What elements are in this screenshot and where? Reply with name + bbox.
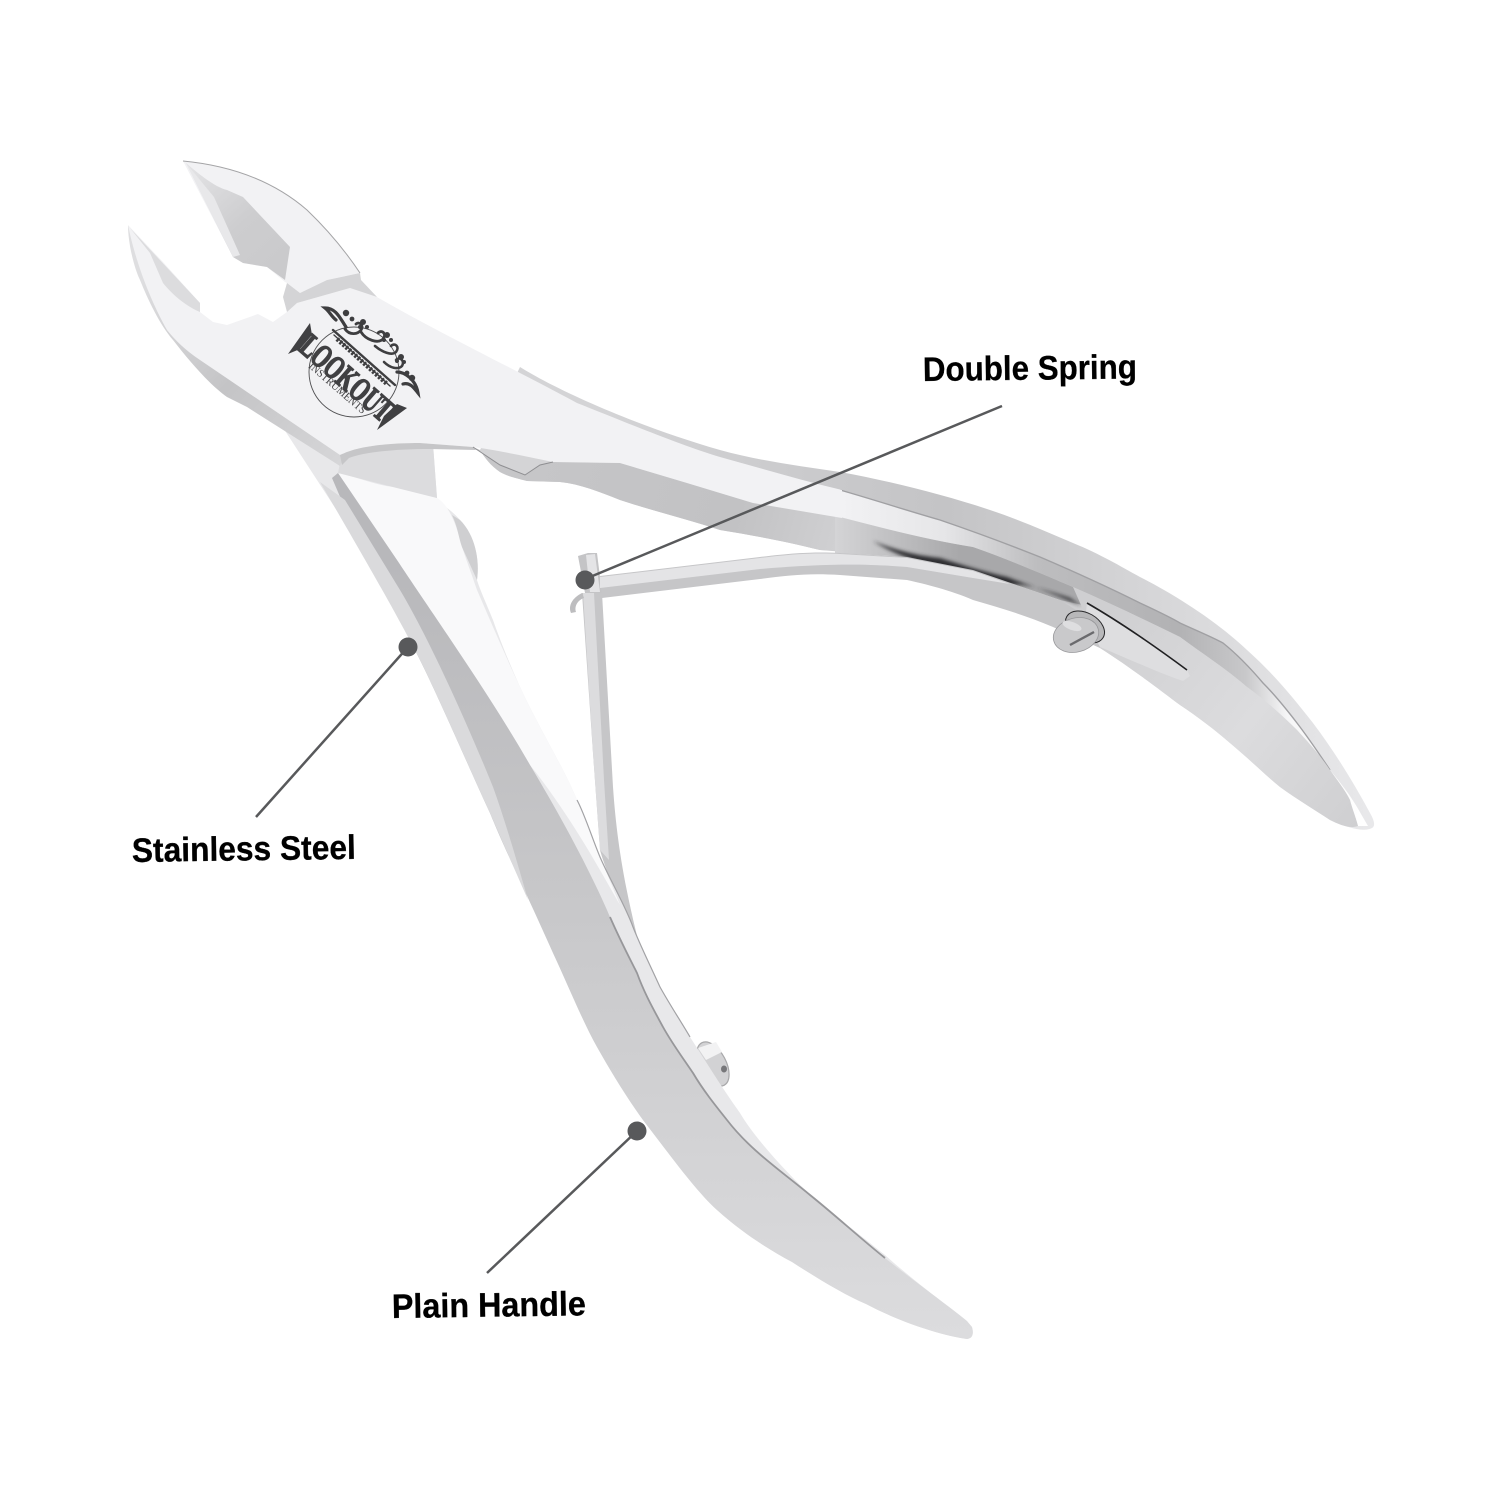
brand logo [288,308,418,430]
handle tail face [1073,587,1358,827]
anchor dot [628,1122,646,1140]
leader line [256,647,408,817]
upper jaw cutting facet [186,163,290,280]
label text: Double Spring [923,348,1137,389]
shoulder [338,444,437,498]
spring leaf: vertical bar [570,553,642,955]
slot and tail of spring [1085,603,1190,681]
callout: double spring [576,348,1137,590]
label text: Stainless Steel [132,829,356,870]
lower grey face [473,447,880,553]
shadow bed under handle [835,514,1100,620]
spring leaf: horizontal bar [600,552,1190,681]
lower handle arm [280,423,973,1339]
screw on lower handle [690,1037,736,1091]
logo subtitle: INSTRUMENTS [306,360,368,417]
bright facet [338,473,620,905]
leader line [590,406,1002,577]
wordmark end flares [288,323,407,430]
lower jaw cutting facet [130,228,200,312]
crown [325,308,418,393]
ridge strip [840,490,1368,826]
jaw and joint head [128,161,842,518]
callout: stainless steel [132,638,418,870]
upper handle arm [473,367,1374,830]
head underside band [340,443,476,465]
logo circle [309,327,399,417]
anchor dot [576,570,594,590]
leader line [487,1131,637,1273]
grey facet [332,473,973,1339]
screw on upper handle [1049,604,1110,657]
joint band [283,273,377,312]
top edge outline [183,161,360,273]
inner edge streaks [610,917,885,1258]
label text: Plain Handle [392,1285,586,1326]
upper jaw [183,161,360,293]
head face [128,225,842,518]
lower jaw outer band [128,225,345,466]
logo wordmark: LOOKOUT [292,328,400,429]
pale outer edge strip [320,482,528,900]
callout: plain handle [392,1122,646,1326]
anchor dot [398,638,418,656]
nail nipper tool [128,161,1374,1339]
